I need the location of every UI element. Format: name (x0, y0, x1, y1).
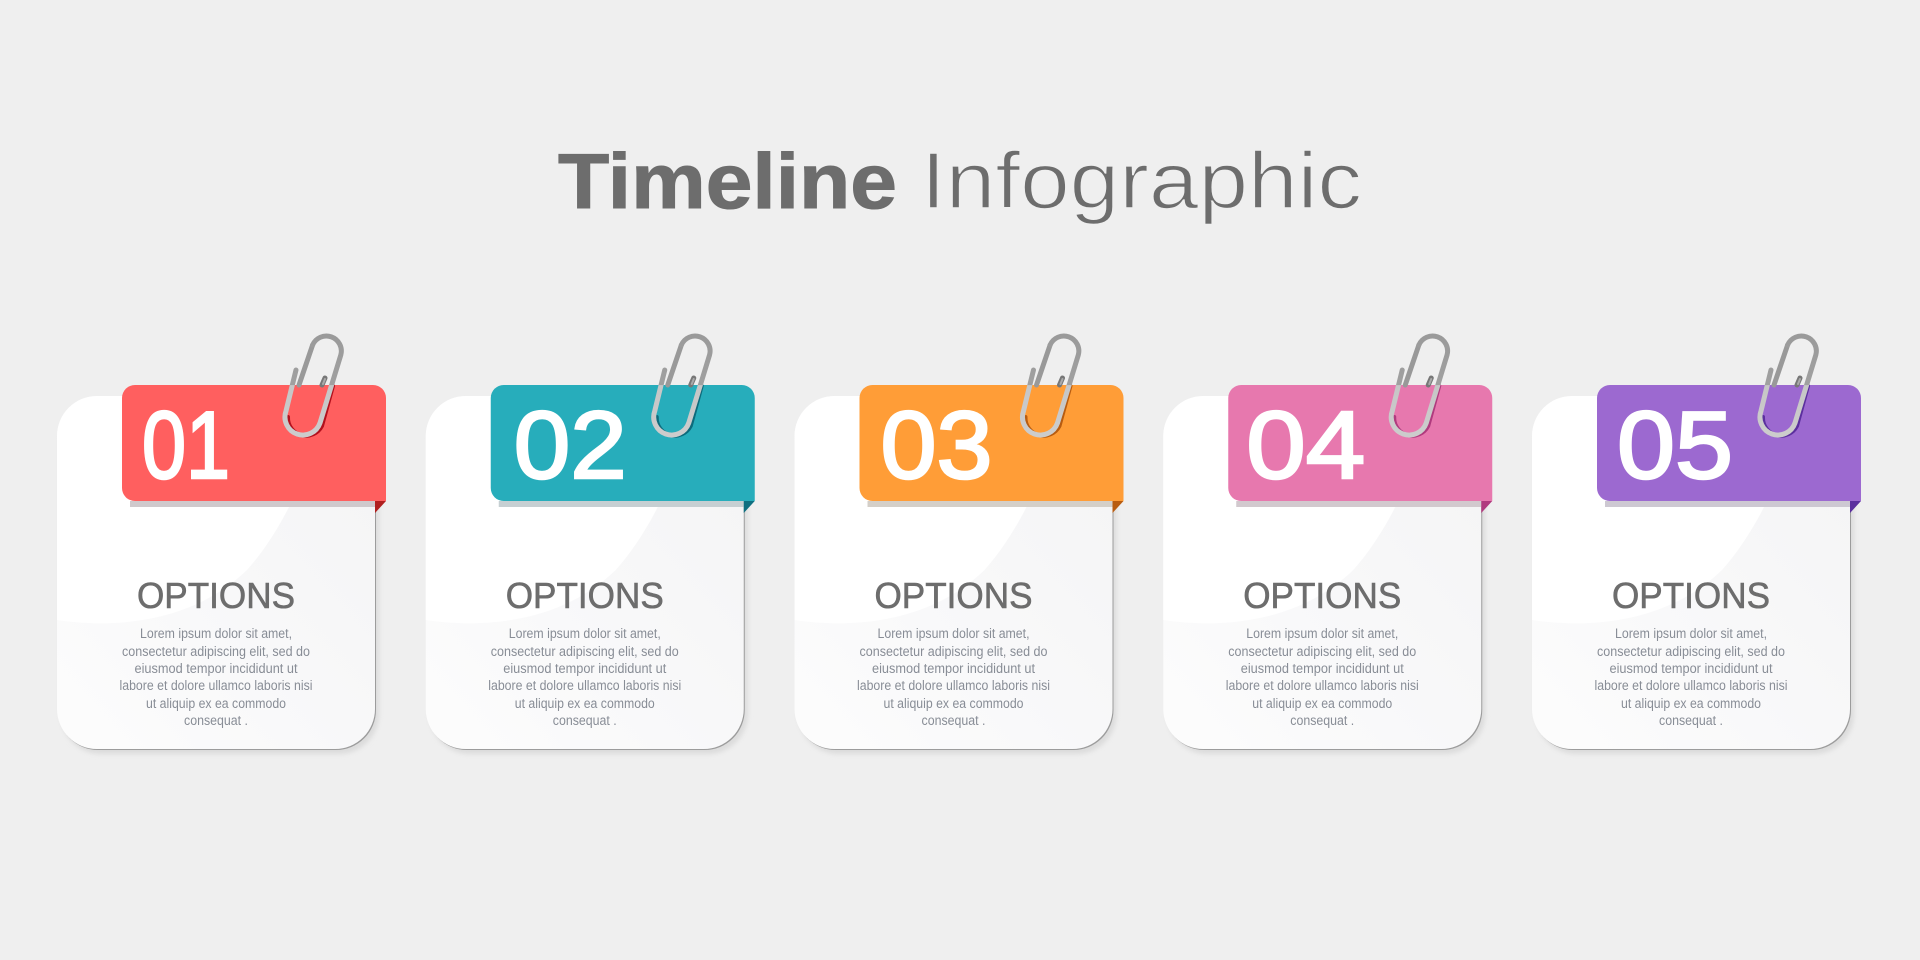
text block: consectetur adipiscing elit, sed do (122, 644, 310, 659)
panel: option 02 (426, 336, 755, 754)
icon: paperclip (1760, 336, 1816, 436)
ribbon: number 01 (122, 385, 386, 513)
heading: options: OPTIONS (1612, 575, 1770, 616)
text block: ut aliquip ex ea commodo (1252, 696, 1392, 711)
card body (1532, 396, 1854, 754)
ribbon: number 02 (491, 385, 755, 513)
text block: eiusmod tempor incididunt ut (872, 661, 1035, 676)
title: Timeline (558, 137, 897, 225)
text block: consectetur adipiscing elit, sed do (1228, 644, 1416, 659)
text block: Lorem ipsum dolor sit amet, (1246, 626, 1398, 641)
ribbon: number 05: 05 (1617, 392, 1733, 499)
title: Infographic (921, 136, 1362, 225)
icon: paperclip (1022, 336, 1079, 436)
panel: option 03 (794, 336, 1124, 754)
ribbon: number 03: 03 (880, 392, 992, 499)
text block: consequat . (922, 713, 986, 728)
text block: consectetur adipiscing elit, sed do (1597, 644, 1785, 659)
text block: ut aliquip ex ea commodo (884, 696, 1024, 711)
heading: options: OPTIONS (1243, 575, 1401, 616)
card body (794, 396, 1116, 754)
panel: option 01 (57, 336, 386, 754)
text block (120, 626, 312, 728)
text block: labore et dolore ullamco laboris nisi (1594, 678, 1788, 693)
panel: option 04 (1163, 336, 1492, 754)
heading: options: OPTIONS (874, 575, 1032, 616)
heading: options: OPTIONS (506, 575, 664, 616)
text block: labore et dolore ullamco laboris nisi (1226, 678, 1419, 693)
ribbon: number 01: 01 (142, 392, 230, 499)
text block: consectetur adipiscing elit, sed do (491, 644, 679, 659)
text block: labore et dolore ullamco laboris nisi (857, 678, 1050, 693)
ribbon: number 03 (860, 385, 1124, 513)
text block: Lorem ipsum dolor sit amet, (509, 626, 661, 641)
text block: ut aliquip ex ea commodo (515, 696, 655, 711)
icon: paperclip (1391, 336, 1448, 436)
text block: eiusmod tempor incididunt ut (1241, 661, 1404, 676)
text block: consequat . (184, 713, 248, 728)
text block: Lorem ipsum dolor sit amet, (878, 626, 1030, 641)
text block: Lorem ipsum dolor sit amet, (140, 626, 292, 641)
text block: ut aliquip ex ea commodo (1621, 696, 1761, 711)
ribbon: number 04: 04 (1246, 392, 1365, 499)
text block (857, 626, 1050, 728)
text block: eiusmod tempor incididunt ut (503, 661, 666, 676)
text block (488, 626, 681, 728)
ribbon: number 02: 02 (514, 392, 627, 499)
text block: Lorem ipsum dolor sit amet, (1615, 626, 1767, 641)
card body (57, 396, 379, 754)
card body (1163, 396, 1485, 754)
text block: eiusmod tempor incididunt ut (134, 661, 298, 676)
text block: consequat . (1659, 713, 1723, 728)
text block: consectetur adipiscing elit, sed do (860, 644, 1048, 659)
text block: labore et dolore ullamco laboris nisi (488, 678, 681, 693)
text block: eiusmod tempor incididunt ut (1610, 661, 1773, 676)
ribbon: number 05 (1597, 385, 1861, 513)
icon: paperclip (285, 336, 341, 436)
text block: labore et dolore ullamco laboris nisi (120, 678, 312, 693)
text block: ut aliquip ex ea commodo (146, 696, 286, 711)
ribbon: number 04 (1228, 385, 1492, 513)
text block (1594, 626, 1788, 728)
title (558, 136, 1362, 225)
heading: options: OPTIONS (137, 575, 295, 616)
text block: consequat . (1290, 713, 1354, 728)
text block (1226, 626, 1419, 728)
text block: consequat . (553, 713, 617, 728)
icon: paperclip (654, 336, 710, 436)
card body (426, 396, 748, 754)
panel: option 05 (1532, 336, 1861, 754)
